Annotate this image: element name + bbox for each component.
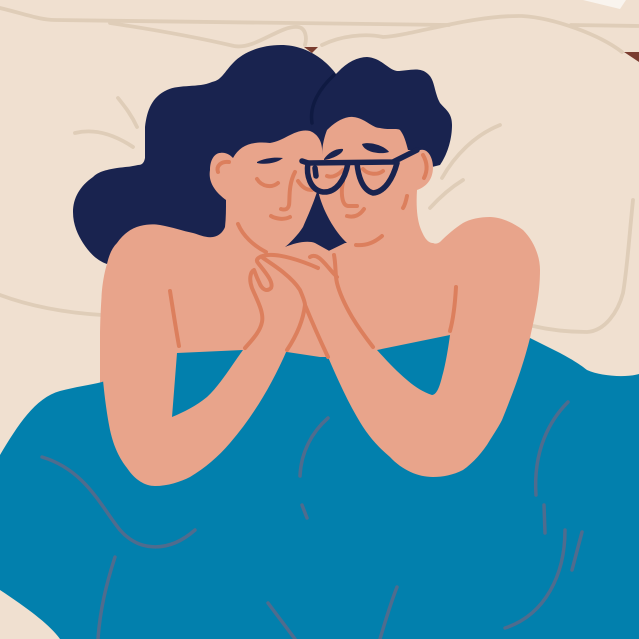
blanket	[0, 335, 639, 639]
gap between faces	[285, 150, 347, 253]
woman's hair	[73, 45, 345, 264]
skin fold lines	[170, 155, 456, 357]
glasses	[302, 150, 417, 193]
man's eyebrows	[324, 143, 389, 160]
man's hair	[310, 57, 452, 200]
paper corner	[583, 0, 626, 9]
clasped hands lines	[245, 255, 373, 357]
man's torso, neck and face	[317, 117, 480, 370]
woman's torso, neck and face	[100, 131, 333, 400]
man's arm	[305, 217, 540, 477]
woman's face lines	[218, 162, 312, 252]
hair parting line	[312, 75, 334, 123]
woman's eyebrow	[257, 158, 283, 164]
headboard corners	[304, 47, 639, 62]
woman's arm	[100, 270, 305, 486]
man's face lines	[327, 155, 427, 245]
blanket gap inside man's arm	[377, 335, 450, 395]
torso marks	[170, 287, 456, 346]
blanket folds	[42, 402, 582, 639]
headboard and pillow creases	[0, 8, 639, 332]
